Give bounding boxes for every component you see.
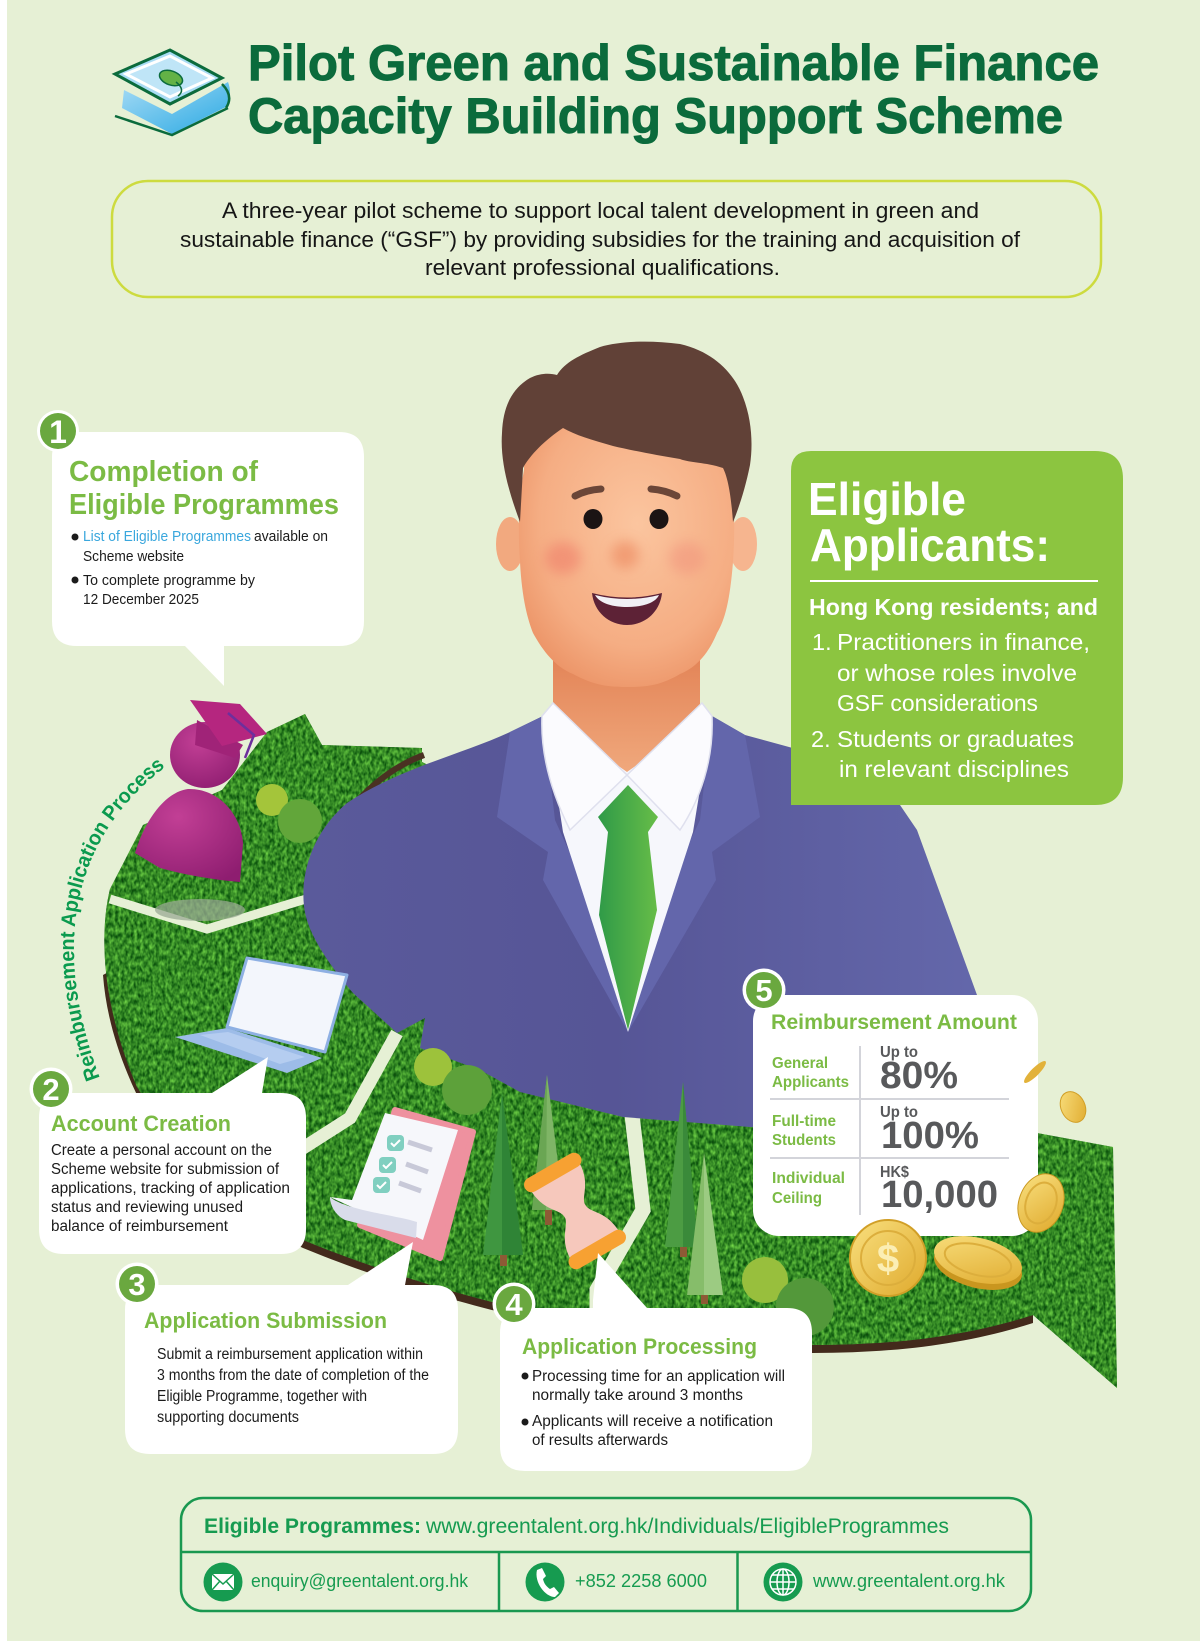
badge 4: 4	[505, 1287, 523, 1322]
callout 2: account creation: Scheme website for submission of	[51, 1161, 280, 1178]
eligible applicants panel: GSF considerations	[837, 690, 1038, 716]
hair	[502, 342, 752, 522]
eligible applicants panel: Practitioners in finance,	[837, 629, 1090, 655]
title: Capacity Building Support Scheme	[248, 88, 1063, 144]
bushes	[256, 784, 834, 1336]
footer contact panel: www.greentalent.org.hk/Individuals/EligibleProgrammes	[425, 1515, 949, 1538]
callout 5: reimbursement amount: 80%	[880, 1055, 958, 1097]
callout 2: account creation: applications, tracking of application	[51, 1180, 290, 1197]
eyebrows	[575, 489, 601, 496]
eligible applicants panel: Eligible	[808, 473, 966, 525]
ears	[496, 517, 524, 571]
eligible applicants panel: Applicants:	[810, 519, 1050, 571]
badge 1: 1	[49, 414, 67, 450]
callout 5: reimbursement amount: Full-time	[772, 1113, 836, 1130]
icon: gold coins	[850, 1059, 1091, 1298]
badge 3	[116, 1262, 158, 1306]
face	[519, 415, 734, 687]
callout 5: reimbursement amount: Up to	[880, 1104, 918, 1121]
eligible applicants panel	[791, 451, 1123, 805]
callout 2: account creation: Account Creation	[51, 1111, 231, 1136]
callout 5: reimbursement amount: Up to	[880, 1044, 918, 1061]
eligible applicants panel: in relevant disciplines	[839, 756, 1069, 782]
callout 3: application submission: 3 months from the date of completion of the	[157, 1367, 429, 1384]
callout 5: reimbursement amount: HK$	[880, 1164, 909, 1181]
eligible applicants panel: Students or graduates	[837, 726, 1074, 752]
tie	[598, 785, 658, 1030]
suit jacket	[303, 716, 990, 1127]
callout 1: completion of eligible programmes: To complete programme by	[83, 573, 256, 589]
callout 3: application submission: supporting documents	[157, 1409, 299, 1426]
callout 1: completion of eligible programmes: Completion of	[69, 456, 258, 488]
intro text box: A three-year pilot scheme to support local talent development in green and	[222, 198, 979, 223]
icon: phone	[526, 1562, 564, 1602]
callout 2: account creation: Create a personal account on the	[51, 1142, 272, 1159]
title	[248, 35, 1099, 144]
callout 3: application submission: Eligible Programme, together with	[157, 1388, 367, 1405]
callout 3: application submission: Application Submission	[144, 1308, 387, 1333]
intro text box: relevant professional qualifications.	[425, 255, 780, 280]
grass footpaths	[110, 899, 643, 1312]
callout 1: completion of eligible programmes: available on	[254, 529, 328, 545]
callout 5: reimbursement amount	[742, 968, 1038, 1236]
intro text box: sustainable finance (“GSF”) by providing subsidies for the training and acquisition of	[180, 227, 1021, 252]
grass ring landscape	[103, 714, 1117, 1388]
badge 5: 5	[755, 973, 773, 1008]
reimbursement process curved label: Reimbursement Application Process	[60, 760, 164, 1082]
callout 1: completion of eligible programmes: 12 December 2025	[83, 592, 199, 608]
eligible applicants panel: or whose roles involve	[837, 660, 1077, 686]
callout 3: application submission	[116, 1242, 458, 1454]
shirt	[545, 716, 712, 1032]
intro text box	[112, 181, 1101, 297]
icon: gold coins: $	[877, 1237, 899, 1281]
nose	[611, 541, 639, 569]
footer contact panel: Eligible Programmes:	[204, 1515, 421, 1538]
callout 4: application processing	[492, 1253, 812, 1471]
callout 4: application processing: Processing time for an application will	[532, 1368, 785, 1385]
icon: hourglass	[521, 1150, 629, 1272]
icon: laptop	[175, 958, 347, 1073]
badge 2: 2	[42, 1072, 60, 1107]
badge 4	[492, 1282, 536, 1326]
footer contact panel	[181, 1498, 1031, 1611]
icon: graduate figure	[135, 700, 267, 921]
callout 5: reimbursement amount: Reimbursement Amount	[771, 1010, 1017, 1034]
icon: email	[204, 1562, 242, 1602]
callout 4: application processing: of results afterwards	[532, 1432, 668, 1449]
footer contact panel: www.greentalent.org.hk	[812, 1570, 1006, 1591]
icon: globe	[764, 1562, 802, 1602]
callout 2: account creation: status and reviewing unused	[51, 1199, 243, 1216]
icon: book with leaf logo	[115, 50, 230, 135]
callout 4: application processing: normally take around 3 months	[532, 1387, 743, 1404]
cheeks	[545, 542, 581, 574]
title: Pilot Green and Sustainable Finance	[248, 35, 1099, 91]
badge 5	[742, 968, 786, 1012]
badge 2	[30, 1068, 72, 1110]
callout 1: completion of eligible programmes	[37, 410, 364, 686]
callout 2: account creation: balance of reimbursement	[51, 1218, 229, 1235]
eligible applicants panel: 2.	[811, 726, 831, 752]
callout 4: application processing: Application Processing	[522, 1334, 757, 1359]
callout 5: reimbursement amount: Individual	[772, 1170, 845, 1187]
callout 5: reimbursement amount: General	[772, 1055, 828, 1072]
mouth	[592, 593, 662, 625]
callout 5: reimbursement amount: Students	[772, 1132, 836, 1149]
callout 4: application processing: Applicants will receive a notification	[532, 1413, 773, 1430]
callout 3: application submission: Submit a reimbursement application within	[157, 1346, 423, 1363]
callout 1: completion of eligible programmes: List of Eligible Programmes	[83, 529, 251, 545]
suit lapels	[497, 716, 628, 1032]
footer contact panel: enquiry@greentalent.org.hk	[251, 1570, 469, 1591]
badge 1	[37, 410, 79, 452]
man illustration	[303, 342, 990, 1127]
neck	[553, 640, 700, 772]
icon: checklist document	[330, 1110, 473, 1258]
trees	[483, 1075, 723, 1304]
callout 2: account creation	[30, 1057, 306, 1254]
eyes	[584, 509, 602, 529]
callout 5: reimbursement amount: Applicants	[772, 1074, 849, 1091]
callout 1: completion of eligible programmes: Scheme website	[83, 549, 184, 565]
badge 3: 3	[128, 1267, 146, 1302]
shirt collar	[542, 703, 627, 830]
callout 5: reimbursement amount: Ceiling	[772, 1190, 822, 1207]
callout 5: reimbursement amount: 100%	[881, 1115, 979, 1157]
eligible applicants panel: Hong Kong residents; and	[809, 594, 1098, 620]
callout 1: completion of eligible programmes: Eligible Programmes	[69, 489, 339, 521]
callout 5: reimbursement amount: 10,000	[881, 1174, 998, 1216]
footer contact panel: +852 2258 6000	[575, 1570, 707, 1591]
eligible applicants panel: 1.	[812, 629, 832, 655]
